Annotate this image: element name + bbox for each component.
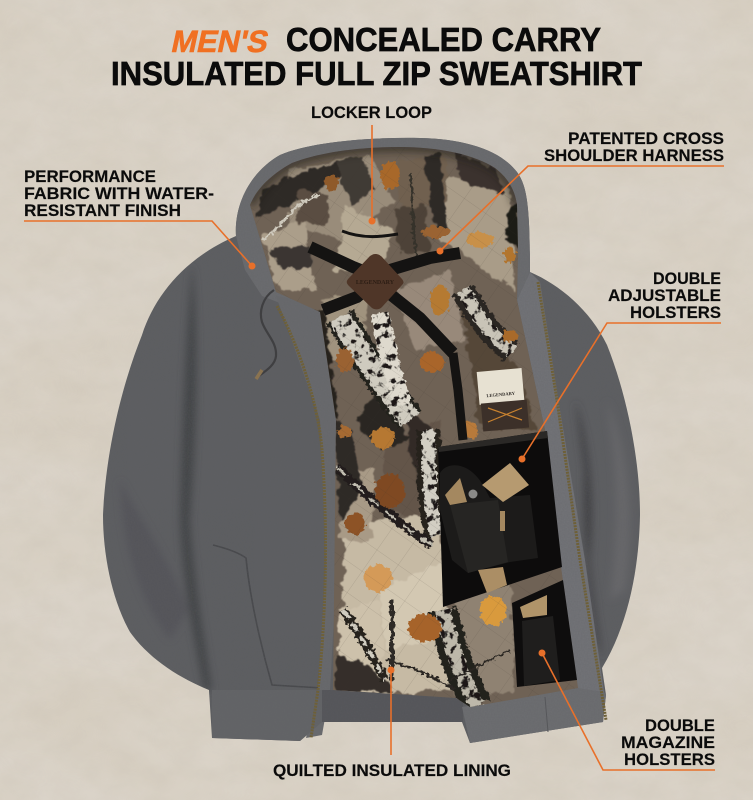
drawcord	[256, 290, 276, 379]
holster panel	[438, 431, 562, 607]
label: harness: SHOULDER HARNESS	[544, 147, 724, 165]
jacket: left hem rib	[212, 690, 322, 741]
jacket: right placket	[517, 272, 604, 692]
label: harness: PATENTED CROSS	[568, 130, 724, 148]
label: locker loop: LOCKER LOOP	[311, 104, 432, 122]
jacket: front kangaroo pocket	[213, 545, 322, 688]
right zipper	[538, 282, 606, 720]
camo: bark speckle	[340, 290, 512, 706]
camo: dark patches	[258, 152, 520, 692]
title: orange word: MEN'S	[168, 24, 272, 59]
leader: magazine holsters	[538, 650, 715, 770]
title	[111, 22, 642, 93]
leader: performance fabric	[24, 221, 256, 270]
leader: locker loop	[368, 125, 376, 224]
jacket	[100, 136, 645, 746]
leather diamond logo patch: LEGENDARY	[356, 280, 395, 286]
leader: quilted lining	[388, 666, 394, 755]
panel: black backing	[512, 580, 577, 687]
label: magazine holsters: MAGAZINE	[621, 734, 715, 752]
holster: tan strap	[500, 511, 505, 531]
label: performance fabric: FABRIC WITH WATER-	[24, 185, 214, 203]
label: magazine holsters	[621, 717, 715, 769]
camo: light patches	[262, 155, 535, 695]
magazine holster panel	[512, 580, 577, 687]
label: performance fabric: PERFORMANCE	[24, 168, 156, 186]
cross shoulder harness straps	[310, 231, 463, 440]
leader: adjustable holsters	[518, 323, 721, 462]
magazine: tan top	[520, 595, 547, 618]
label: adjustable holsters: DOUBLE	[653, 270, 721, 288]
title: line one: CONCEALED CARRY	[286, 22, 601, 59]
leader: harness	[436, 166, 724, 254]
label: performance fabric	[24, 168, 214, 220]
woven label	[477, 368, 529, 432]
camo: birch trunks	[262, 175, 512, 706]
leather diamond logo patch	[347, 254, 404, 309]
jacket: right hem rib	[462, 688, 606, 743]
magazine: pouch	[522, 616, 560, 686]
label: performance fabric: RESISTANT FINISH	[24, 202, 181, 220]
jacket shading	[120, 262, 630, 690]
label: magazine holsters: DOUBLE	[645, 717, 715, 735]
camo: hood inner shadow	[250, 147, 517, 205]
holster: tan barrel	[478, 567, 507, 593]
label: adjustable holsters: ADJUSTABLE	[608, 287, 721, 305]
jacket body: gray fleece	[103, 138, 640, 743]
jacket: back hem	[322, 690, 463, 722]
zippers	[277, 282, 606, 738]
holster: black nylon body	[440, 465, 538, 573]
label: quilted lining: QUILTED INSULATED LINING	[273, 762, 511, 780]
camo quilted lining	[245, 140, 585, 710]
label: adjustable holsters: HOLSTERS	[630, 304, 721, 322]
camo: quilting stitches	[268, 154, 569, 697]
jacket: hood rim	[236, 138, 530, 305]
label: harness	[544, 130, 724, 165]
title: line two: INSULATED FULL ZIP SWEATSHIRT	[111, 56, 642, 93]
panel: black backing	[438, 431, 562, 607]
jacket: left placket	[276, 296, 336, 738]
holster: snap button	[468, 490, 478, 498]
leader lines and dots	[24, 125, 724, 770]
camo: autumn leaves	[325, 161, 518, 642]
jacket: fleece texture	[100, 136, 645, 746]
label: magazine holsters: HOLSTERS	[624, 751, 715, 769]
label: adjustable holsters	[608, 270, 721, 322]
holster: tan pistol grip	[445, 478, 467, 505]
holster: pistol magazine top	[482, 463, 529, 502]
woven label: LEGENDARY	[486, 391, 516, 398]
left zipper	[277, 306, 325, 738]
